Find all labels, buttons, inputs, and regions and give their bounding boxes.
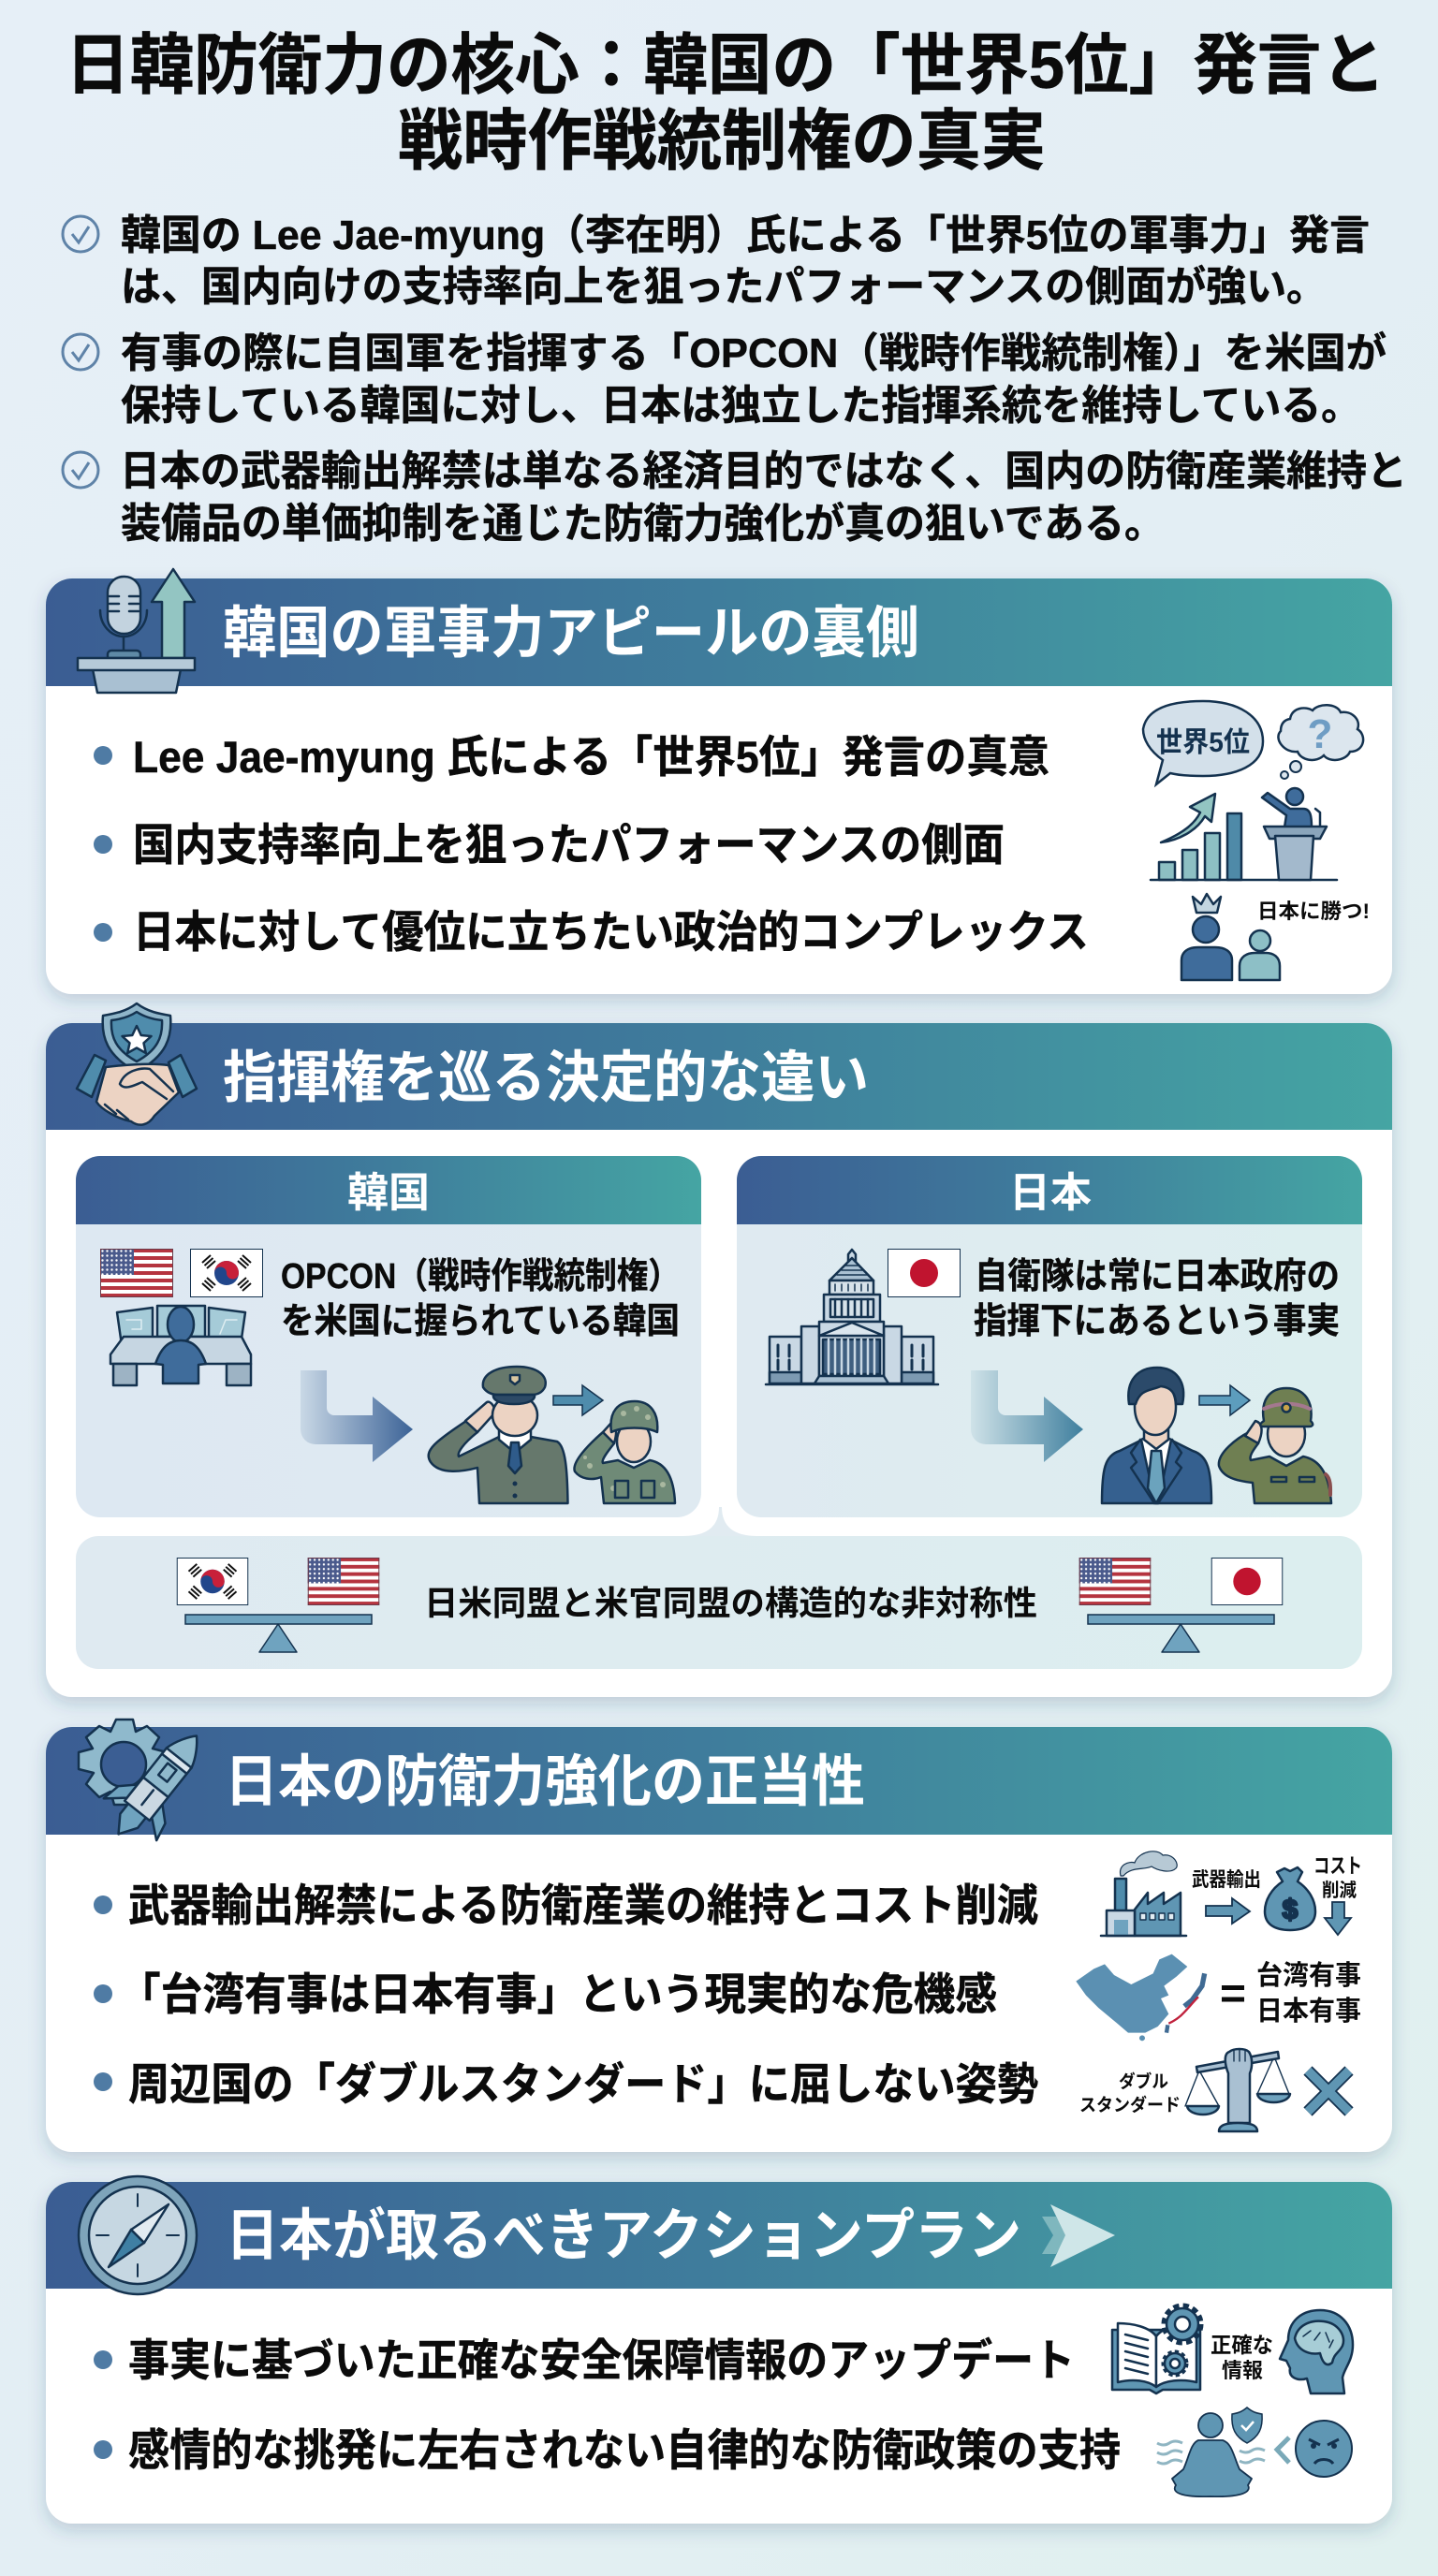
icon: operator at control console <box>110 1306 251 1385</box>
small arrow <box>1199 1385 1250 1415</box>
thought cloud: ? <box>1308 711 1332 757</box>
bullet list <box>94 732 1089 957</box>
flag: USA <box>100 1249 173 1297</box>
summary item 3: 日本の武器輸出解禁は単なる経済目的ではなく、国内の防衛産業維持と <box>120 448 1407 494</box>
bullet list: 事実に基づいた正確な安全保障情報のアップデート <box>128 2335 1075 2385</box>
panel: Korea military appeal <box>46 569 1392 994</box>
thought cloud <box>1278 705 1363 779</box>
bullet list: Lee Jae-myung 氏による「世界5位」発言の真意 <box>133 732 1049 782</box>
equals: = <box>1220 1969 1246 2017</box>
caption: 日米同盟と米官同盟の構造的な非対称性 <box>424 1584 1037 1622</box>
label <box>1313 1854 1362 1901</box>
figure: Korean soldier saluting <box>574 1401 675 1503</box>
icon: gear and missile <box>79 1715 223 1855</box>
illustration: book, gears and brain <box>1112 2306 1353 2393</box>
icon: scales with fist <box>1185 2049 1290 2131</box>
label <box>1256 1960 1361 2027</box>
sub-panel header <box>76 1156 701 1224</box>
speech bubble: 世界5位 <box>1156 727 1250 758</box>
text: 指揮下にあるという事実 <box>974 1302 1340 1341</box>
icon: shield and handshake <box>77 1003 197 1125</box>
bar chart with arrow <box>1151 794 1337 880</box>
small arrow <box>553 1385 603 1415</box>
label: ダブル <box>1119 2071 1168 2092</box>
bullet list: 感情的な挑発に左右されない自律的な防衛政策の支持 <box>128 2425 1121 2475</box>
summary item 1: は、国内向けの支持率向上を狙ったパフォーマンスの側面が強い。 <box>121 264 1327 310</box>
text <box>974 1257 1340 1341</box>
icon: money bag: $ <box>1283 1895 1299 1925</box>
icon: head with brain <box>1280 2310 1353 2393</box>
panel: Japan defense legitimacy <box>46 1715 1392 2152</box>
label <box>1079 2071 1181 2115</box>
text <box>281 1257 680 1341</box>
icon: chevron arrow <box>1042 2204 1115 2267</box>
heading: 日本が取るべきアクションプラン <box>226 2204 1021 2267</box>
sub-panel: Korea <box>76 1156 701 1517</box>
icon: National Diet building <box>766 1250 938 1384</box>
label: スタンダード <box>1079 2094 1181 2115</box>
icon: balance with USA and Japan <box>1079 1558 1283 1652</box>
panel header <box>46 1023 1392 1130</box>
icon: meditating figure with waves <box>1157 2413 1265 2496</box>
heading: 指揮権を巡る決定的な違い <box>223 1046 869 1109</box>
panel: command authority <box>46 1003 1392 1697</box>
figure: civilian leader in suit <box>1102 1368 1211 1503</box>
arrow <box>971 1370 1083 1462</box>
title <box>66 29 1386 179</box>
arrow <box>1206 1898 1250 1924</box>
label: 正確な <box>1211 2333 1273 2357</box>
summary item 2 <box>63 330 1387 429</box>
heading: 日本の防衛力強化の正当性 <box>225 1750 865 1813</box>
factory <box>1101 1852 1186 1936</box>
illustration: scales and cross <box>1079 2049 1349 2131</box>
label: 武器輸出 <box>1192 1869 1261 1891</box>
label: 台湾有事 <box>1256 1960 1361 1991</box>
panel header <box>46 1727 1392 1835</box>
flag: South Korea <box>191 1249 262 1297</box>
icon: compass <box>79 2176 197 2294</box>
bullet list <box>94 2335 1121 2475</box>
panel: Japan action plan <box>46 2176 1392 2524</box>
heading: 韓国の軍事力アピールの裏側 <box>223 602 919 665</box>
illustration: factory, arrow, money bag <box>1101 1852 1362 1936</box>
summary item 3 <box>63 448 1407 547</box>
icon: angry face <box>1296 2421 1352 2477</box>
crown and two figures <box>1181 894 1280 980</box>
caption: 日本に勝つ! <box>1257 900 1370 923</box>
figure: officer saluting <box>429 1367 567 1503</box>
bullet list: 周辺国の「ダブルスタンダード」に屈しない姿勢 <box>128 2059 1038 2109</box>
icon: cross <box>1308 2071 1349 2112</box>
bullet list: 国内支持率向上を狙ったパフォーマンスの側面 <box>133 820 1005 870</box>
sub-panel header <box>737 1156 1362 1224</box>
text: 自衛隊は常に日本政府の <box>975 1257 1340 1296</box>
icon: open book with gears <box>1112 2306 1200 2393</box>
summary item 2: 有事の際に自国軍を指揮する「OPCON（戦時作戦統制権）」を米国が <box>121 330 1387 376</box>
flag: Japan <box>888 1249 961 1297</box>
summary list <box>63 212 1407 547</box>
panel header <box>46 2182 1392 2289</box>
icon: less-than chevron <box>1277 2437 1289 2463</box>
speech bubble <box>1143 701 1263 784</box>
arrow <box>1325 1902 1351 1935</box>
illustration: map and Taiwan equals Japan <box>1076 1954 1361 2041</box>
title: 日韓防衛力の核心：韓国の「世界5位」発言と <box>66 29 1386 103</box>
arrow <box>301 1370 413 1462</box>
sub-panel heading: 韓国 <box>347 1170 430 1216</box>
label: 日本有事 <box>1256 1996 1361 2027</box>
bullet list <box>94 1881 1038 2109</box>
panel header <box>46 578 1392 686</box>
icon: shield with check <box>1232 2408 1262 2443</box>
illustration: speech bubble, podium, bars and crown <box>1143 701 1370 980</box>
map <box>1076 1954 1205 2041</box>
bullet list: 日本に対して優位に立ちたい政治的コンプレックス <box>133 907 1089 957</box>
label: 削減 <box>1322 1879 1357 1901</box>
title: 戦時作戦統制権の真実 <box>398 105 1046 179</box>
summary item 1 <box>63 212 1370 310</box>
text: を米国に握られている韓国 <box>281 1302 680 1341</box>
summary item 2: 保持している韓国に対し、日本は独立した指揮系統を維持している。 <box>121 383 1361 429</box>
icon: money bag <box>1265 1867 1315 1930</box>
icon: microphone podium and rising arrow <box>78 569 195 693</box>
label: コスト <box>1313 1854 1362 1878</box>
illustration: calm figure, shield and angry face <box>1157 2408 1352 2496</box>
text: OPCON（戦時作戦統制権） <box>281 1257 680 1296</box>
sub-panel heading: 日本 <box>1009 1170 1092 1216</box>
bullet list: 武器輸出解禁による防衛産業の維持とコスト削減 <box>128 1881 1038 1930</box>
label <box>1211 2333 1273 2382</box>
sub-panel: alliance asymmetry <box>76 1507 1362 1669</box>
icon: balance with Korea and USA <box>177 1558 379 1652</box>
label: 情報 <box>1222 2359 1263 2382</box>
speaker at podium <box>1262 788 1327 880</box>
sub-panel: Japan <box>737 1156 1362 1517</box>
summary item 1: 韓国の Lee Jae-myung（李在明）氏による「世界5位の軍事力」発言 <box>121 212 1370 258</box>
summary item 3: 装備品の単価抑制を通じた防衛力強化が真の狙いである。 <box>121 501 1165 547</box>
figure: Self-Defense Force soldier saluting <box>1219 1388 1331 1503</box>
bullet list: 「台湾有事は日本有事」という現実的な危機感 <box>119 1969 997 2019</box>
